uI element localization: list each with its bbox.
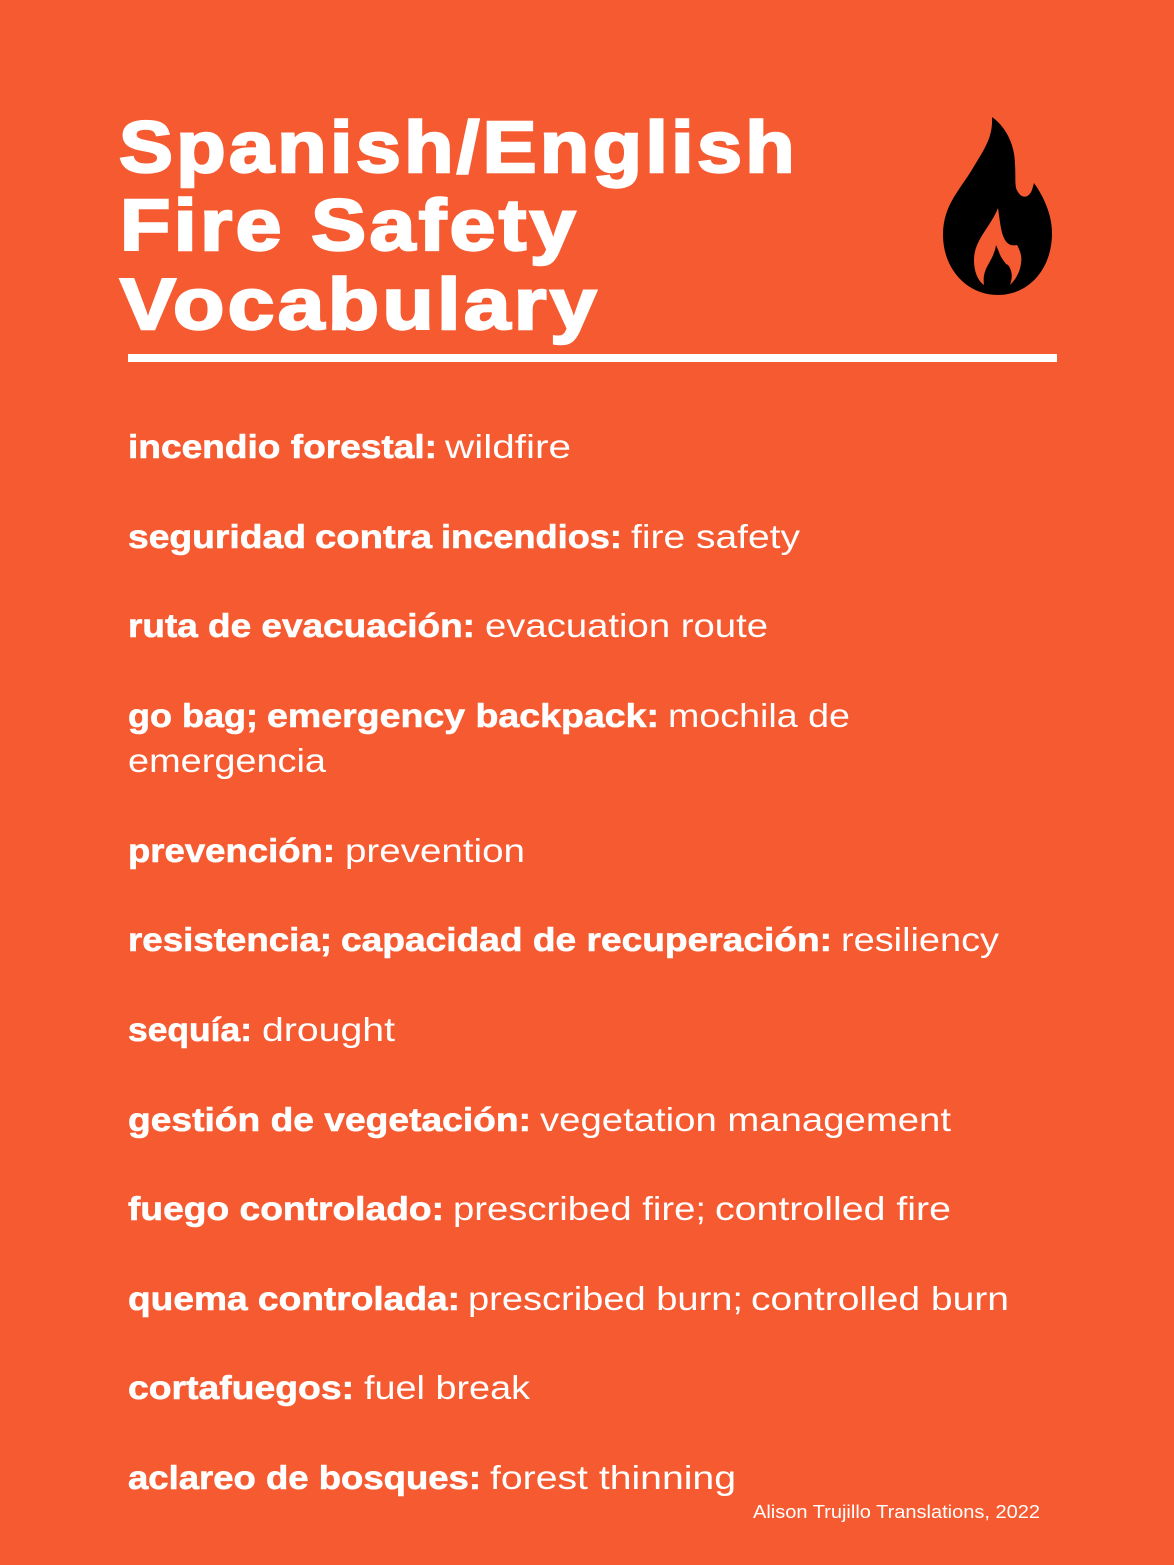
- term: seguridad contra incendios: [128, 518, 801, 555]
- term: sequía: drought: [262, 1011, 395, 1048]
- icon: flame: [943, 117, 1052, 295]
- term: resistencia: capacidad de recuperación:: [341, 921, 832, 958]
- term: seguridad contra incendios: contra: [315, 518, 433, 555]
- term: fuego controlado: [128, 1190, 951, 1227]
- term: sequía: sequía:: [128, 1011, 252, 1048]
- term: aclareo de bosques: forest thinning: [490, 1459, 736, 1496]
- term: quema controlada: quema controlada:: [128, 1280, 460, 1317]
- term: seguridad contra incendios: incendios:: [441, 518, 622, 555]
- term: prevención: prevention: [345, 832, 525, 869]
- term: go bag: mochila de: [668, 697, 850, 734]
- term: prevención: [128, 832, 525, 869]
- term: ruta de evacuación: ruta de evacuación:: [128, 607, 475, 644]
- footer credit: Alison Trujillo Translations, 2022: [753, 1502, 1040, 1522]
- term: aclareo de bosques: aclareo de bosques:: [128, 1459, 481, 1496]
- title: Spanish/English: [119, 108, 798, 188]
- term: resistencia: resistencia;: [128, 921, 332, 958]
- term: ruta de evacuación: evacuation route: [485, 607, 768, 644]
- term: quema controlada: [128, 1280, 1009, 1317]
- term: go bag: emergency backpack:: [267, 697, 659, 734]
- term: resistencia: [128, 921, 1000, 958]
- term: go bag: [128, 697, 850, 779]
- term: quema controlada: prescribed burn;: [468, 1280, 743, 1317]
- term: fuego controlado: fuego controlado:: [128, 1190, 444, 1227]
- term: incendio forestal: [128, 428, 571, 465]
- term: quema controlada: controlled burn: [751, 1280, 1009, 1317]
- title: [119, 108, 798, 345]
- term: gestión de vegetación: gestión de vegetación:: [128, 1101, 531, 1138]
- title divider rule: [128, 354, 1057, 362]
- term: sequía: [128, 1011, 395, 1048]
- term: fuego controlado: controlled fire: [715, 1190, 951, 1227]
- term: prevención: prevención:: [128, 832, 335, 869]
- title: Fire Safety: [120, 186, 579, 266]
- term: cortafuegos: [128, 1369, 531, 1406]
- term: go bag: emergencia: [128, 742, 327, 779]
- term: fuego controlado: prescribed fire;: [453, 1190, 706, 1227]
- term: ruta de evacuación: [128, 607, 768, 644]
- term: cortafuegos: cortafuegos:: [128, 1369, 354, 1406]
- term: aclareo de bosques: [128, 1459, 736, 1496]
- term: resistencia: resiliency: [841, 921, 1000, 958]
- term: incendio forestal: wildfire: [444, 428, 571, 465]
- term: incendio forestal: incendio forestal:: [128, 428, 437, 465]
- term: gestión de vegetación: vegetation management: [540, 1101, 951, 1138]
- title: Vocabulary: [120, 265, 600, 345]
- term: seguridad contra incendios: fire safety: [631, 518, 801, 555]
- term: cortafuegos: fuel break: [364, 1369, 531, 1406]
- term: seguridad contra incendios: seguridad: [128, 518, 306, 555]
- term: gestión de vegetación: [128, 1101, 951, 1138]
- term: go bag: go bag;: [128, 697, 258, 734]
